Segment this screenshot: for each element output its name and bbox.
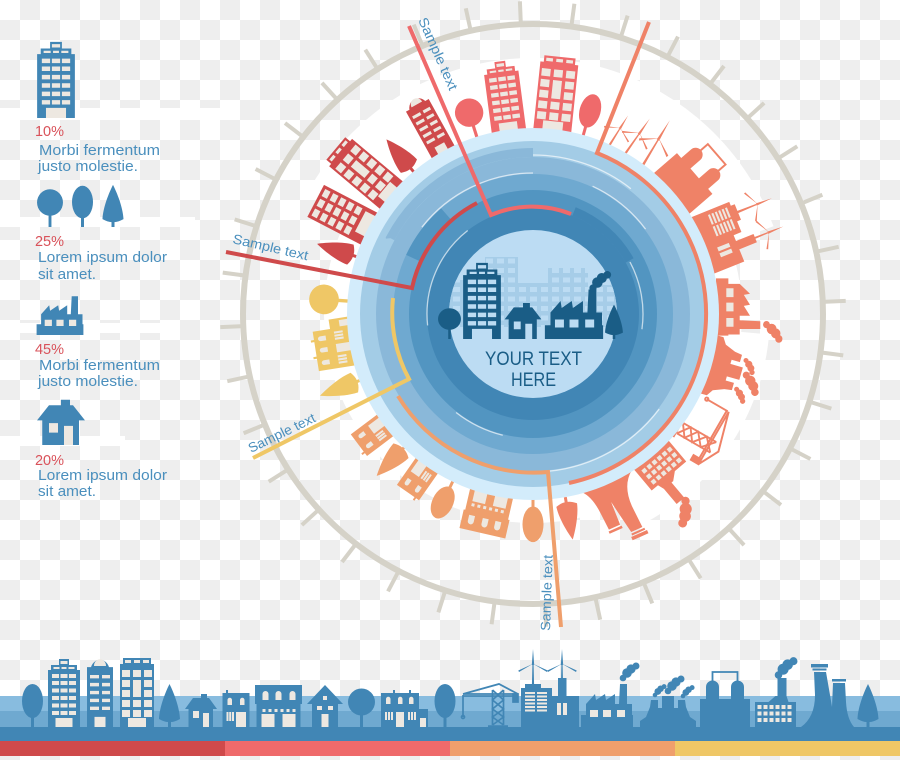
icons: orange group around globe: [348, 414, 544, 542]
icon: house: [37, 400, 85, 445]
white strips behind the left list: [0, 108, 222, 446]
percent 10%: 10%: [35, 123, 64, 140]
globe: concentric rings: [315, 96, 751, 532]
left list item 3: factory 45%: [35, 296, 160, 390]
bottom skyline: [22, 649, 878, 727]
globe centre: faint background skyline: [447, 257, 619, 327]
callout: orange line and arc: [398, 396, 561, 627]
description 4: [38, 467, 167, 500]
icons: salmon group around globe: [555, 108, 790, 551]
description 3: justo molestie.: [37, 373, 138, 390]
icons: pink group around globe: [451, 55, 605, 142]
percent 25%: 25%: [35, 233, 64, 250]
callout: pink line and arc: [409, 26, 571, 215]
description 2: [38, 249, 167, 283]
percent 20%: 20%: [35, 452, 64, 469]
globe centre text: [485, 349, 582, 391]
left list item 1: office building 10%: [35, 42, 160, 175]
label: sample text on yellow line: Sample text: [246, 410, 318, 456]
label: sample text on orange line: Sample text: [538, 554, 556, 631]
icon: office building: [37, 42, 75, 118]
description 3: [37, 357, 160, 390]
globe: thin highlight arcs: [312, 93, 754, 535]
icon: factory: [37, 296, 83, 335]
description 2: Lorem ipsum dolor: [38, 249, 167, 266]
callout: yellow line and arc: [253, 298, 409, 458]
label: sample text on pink line: Sample text: [415, 15, 461, 93]
icon: three trees: [37, 185, 124, 227]
percent 45%: 45%: [35, 341, 64, 358]
globe centre text: YOUR TEXT: [485, 349, 582, 370]
bottom ground bands: [0, 696, 900, 741]
description 2: sit amet.: [38, 266, 96, 283]
description 3: Morbi fermentum: [39, 357, 160, 374]
globe centre: dark city icons: [438, 263, 623, 339]
description 1: Morbi fermentum: [39, 142, 160, 159]
description 4: sit amet.: [38, 483, 96, 500]
icons: yellow group around globe: [308, 284, 366, 406]
bottom colour bar: [0, 741, 900, 756]
left list item 2: trees 25%: [35, 185, 167, 283]
description 1: [37, 142, 160, 175]
outer dial ring with ticks: [220, 1, 846, 627]
left list item 4: house 20%: [35, 400, 167, 500]
description 1: justo molestie.: [37, 158, 138, 175]
callout: salmon line and arc: [569, 22, 706, 483]
globe centre text: HERE: [511, 370, 556, 391]
icons: dark red group around globe: [307, 93, 455, 267]
white halo behind the city globe: [216, 0, 850, 631]
callout: red line and arc: [226, 203, 477, 288]
label: sample text on red line: Sample text: [231, 231, 310, 263]
description 4: Lorem ipsum dolor: [38, 467, 167, 484]
